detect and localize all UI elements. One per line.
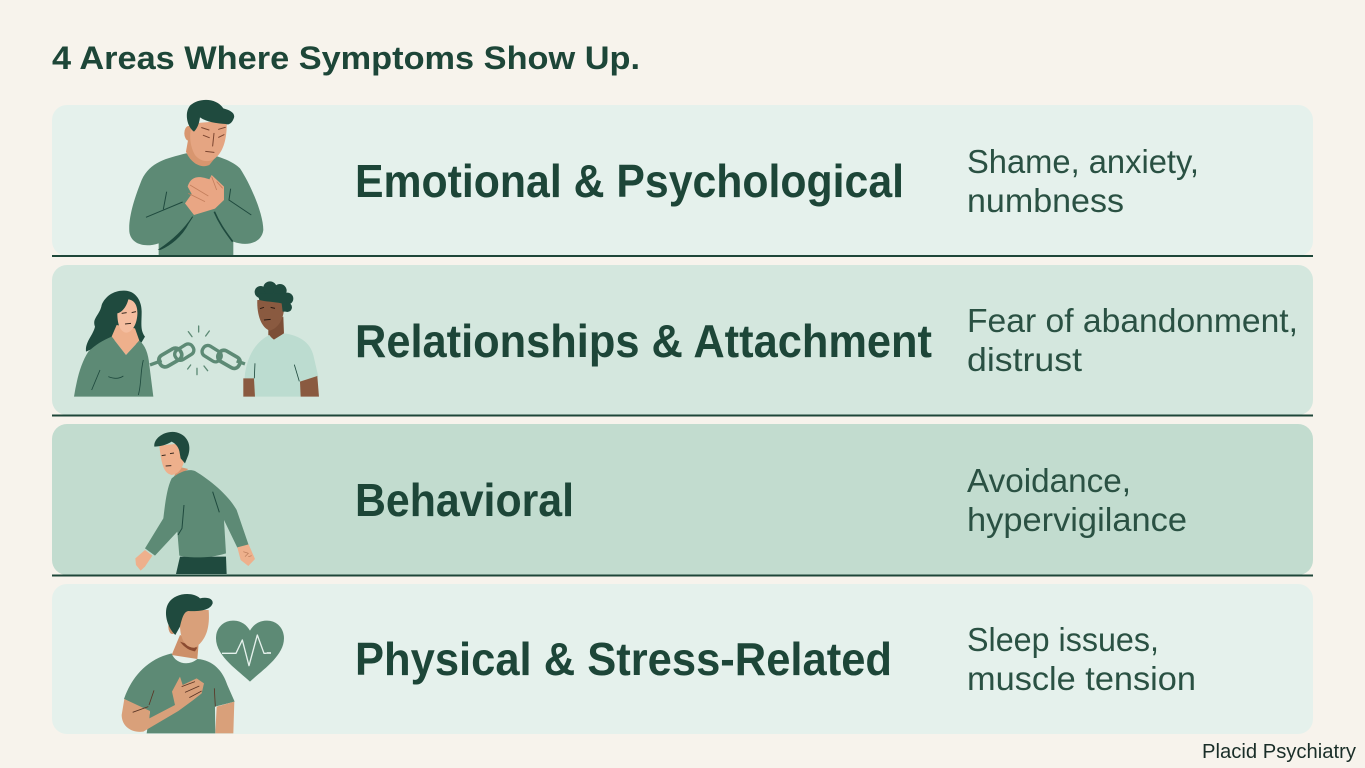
panel: physical and stress-related [52, 584, 1313, 734]
text: physical symptoms: muscle tension [967, 660, 1196, 697]
text: physical symptoms: Sleep issues, [967, 621, 1159, 658]
text: relationship symptoms: distrust [967, 341, 1082, 378]
icon: two people and broken chain [74, 281, 319, 397]
text: behavioral symptoms [967, 462, 1187, 538]
heading: behavioral: Behavioral [355, 474, 574, 526]
text: emotional symptoms [967, 143, 1199, 219]
panel: relationships and attachment [52, 265, 1313, 415]
icon: man holding chest [129, 100, 263, 255]
text: relationship symptoms [967, 302, 1298, 378]
text: emotional symptoms: numbness [967, 182, 1124, 219]
icon: man walking away [135, 432, 255, 574]
text: behavioral symptoms: hypervigilance [967, 501, 1187, 538]
panel: behavioral [52, 424, 1313, 575]
heading: emotional and psychological: Emotional & Psychological [355, 155, 904, 207]
text: emotional symptoms: Shame, anxiety, [967, 143, 1199, 180]
text: behavioral symptoms: Avoidance, [967, 462, 1131, 499]
panel: emotional and psychological [52, 100, 1313, 256]
brand credit: Placid Psychiatry [1202, 741, 1356, 763]
text: physical symptoms [967, 621, 1196, 697]
title: 4 Areas Where Symptoms Show Up. [52, 40, 640, 76]
text: relationship symptoms: Fear of abandonment, [967, 302, 1298, 339]
heading: relationships and attachment: Relationships & Attachment [355, 315, 932, 367]
icon: man with hand on chest and heart [122, 594, 284, 733]
heading: physical and stress-related: Physical & Stress-Related [355, 633, 892, 685]
